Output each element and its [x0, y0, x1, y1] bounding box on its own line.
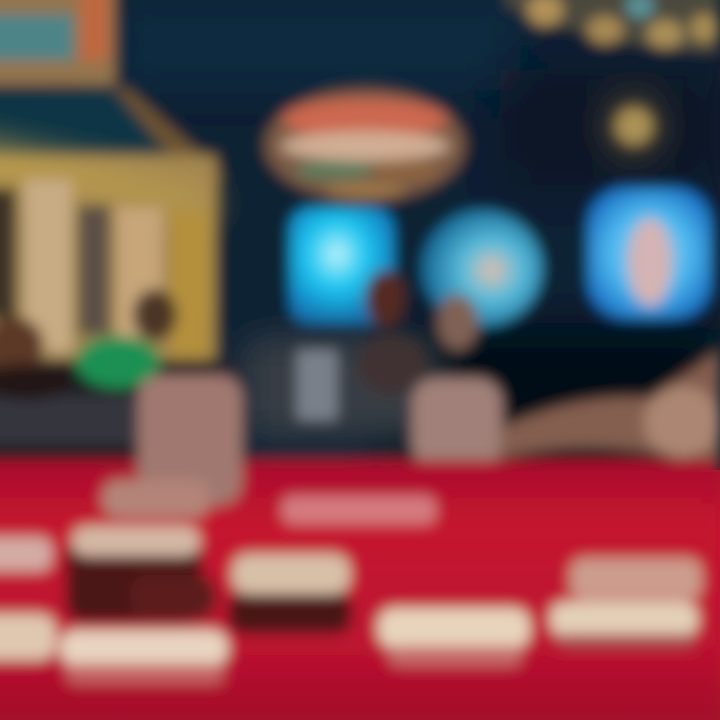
- chips: stack front centre: [378, 608, 530, 666]
- building: gold facade at left: [0, 84, 222, 360]
- screens: three glowing blue displays: [290, 188, 712, 326]
- chips: stack middle: [228, 554, 352, 634]
- chips: stack front left: [0, 537, 228, 684]
- background: dark navy wall: [0, 0, 720, 470]
- sign: top-right marquee lights: [505, 0, 720, 52]
- chips: stack right: [550, 558, 702, 648]
- hand: arm reaching from the right: [500, 350, 720, 494]
- sign: top-left corner: [0, 0, 115, 85]
- crowd: people at the table: [0, 270, 502, 468]
- lamp: small gold circle: [606, 98, 662, 154]
- table: red felt: [0, 460, 720, 720]
- felt underlay keeping the table colour at the frame edge: [0, 470, 720, 720]
- sign: central oval casino sign: [265, 89, 465, 201]
- chips: tall central stack: [66, 375, 242, 622]
